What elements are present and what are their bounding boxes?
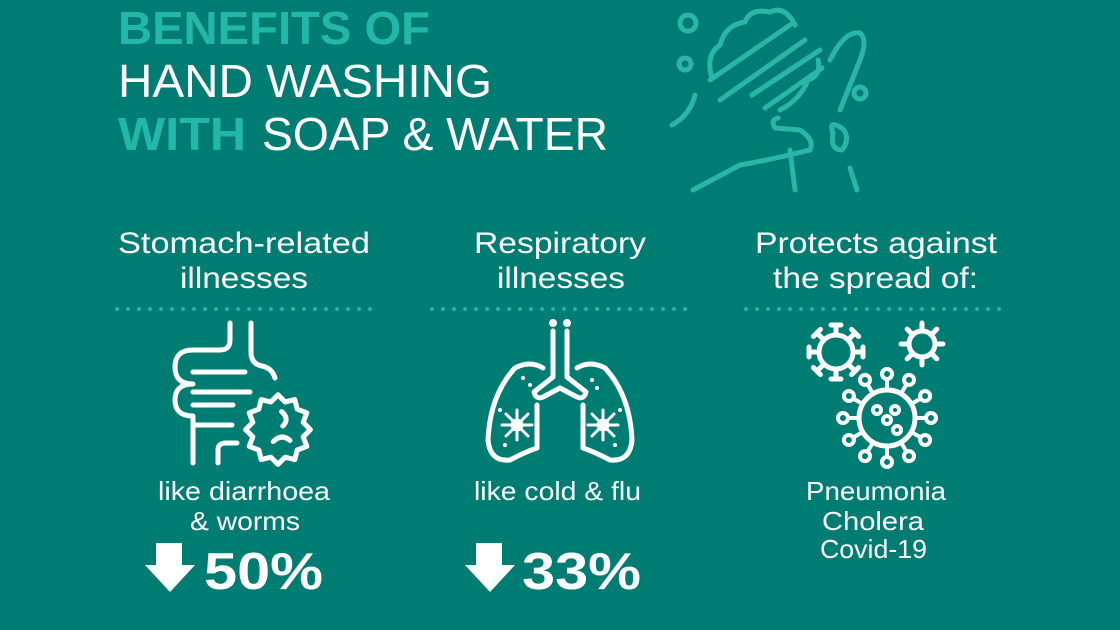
- heading: stomach: Stomach-related: [118, 227, 370, 260]
- text: respiratory examples: like cold & flu: [474, 476, 641, 506]
- heading: respiratory: illnesses: [497, 262, 625, 295]
- title: WITH: [118, 108, 246, 160]
- heading: stomach: illnesses: [180, 262, 308, 295]
- stat: 50%: 50%: [204, 543, 323, 601]
- heading: protects: [755, 227, 998, 295]
- title: [118, 2, 608, 160]
- heading: stomach: [118, 227, 370, 295]
- icon: lungs: [488, 322, 632, 460]
- icon: intestine with germ: [175, 323, 310, 464]
- stat: 33%: [465, 543, 641, 601]
- title: SOAP & WATER: [262, 108, 608, 160]
- title: HAND WASHING: [118, 55, 492, 107]
- icon: viruses: [809, 323, 943, 467]
- text: diseases list: Covid-19: [820, 534, 927, 564]
- title: BENEFITS OF: [118, 2, 430, 54]
- icon: washing hands: [672, 10, 866, 190]
- heading: respiratory: Respiratory: [474, 227, 646, 260]
- stat: 33%: 33%: [522, 543, 641, 601]
- text: stomach examples: like diarrhoea: [158, 476, 331, 506]
- stat: 50%: [145, 543, 323, 601]
- text: stomach examples: & worms: [190, 506, 300, 536]
- heading: protects: Protects against: [755, 227, 998, 260]
- text: diseases list: [806, 476, 947, 564]
- text: diseases list: Cholera: [822, 506, 925, 536]
- text: stomach examples: [158, 476, 331, 536]
- heading: respiratory: [474, 227, 646, 295]
- text: diseases list: Pneumonia: [806, 476, 947, 506]
- heading: protects: the spread of:: [773, 262, 978, 295]
